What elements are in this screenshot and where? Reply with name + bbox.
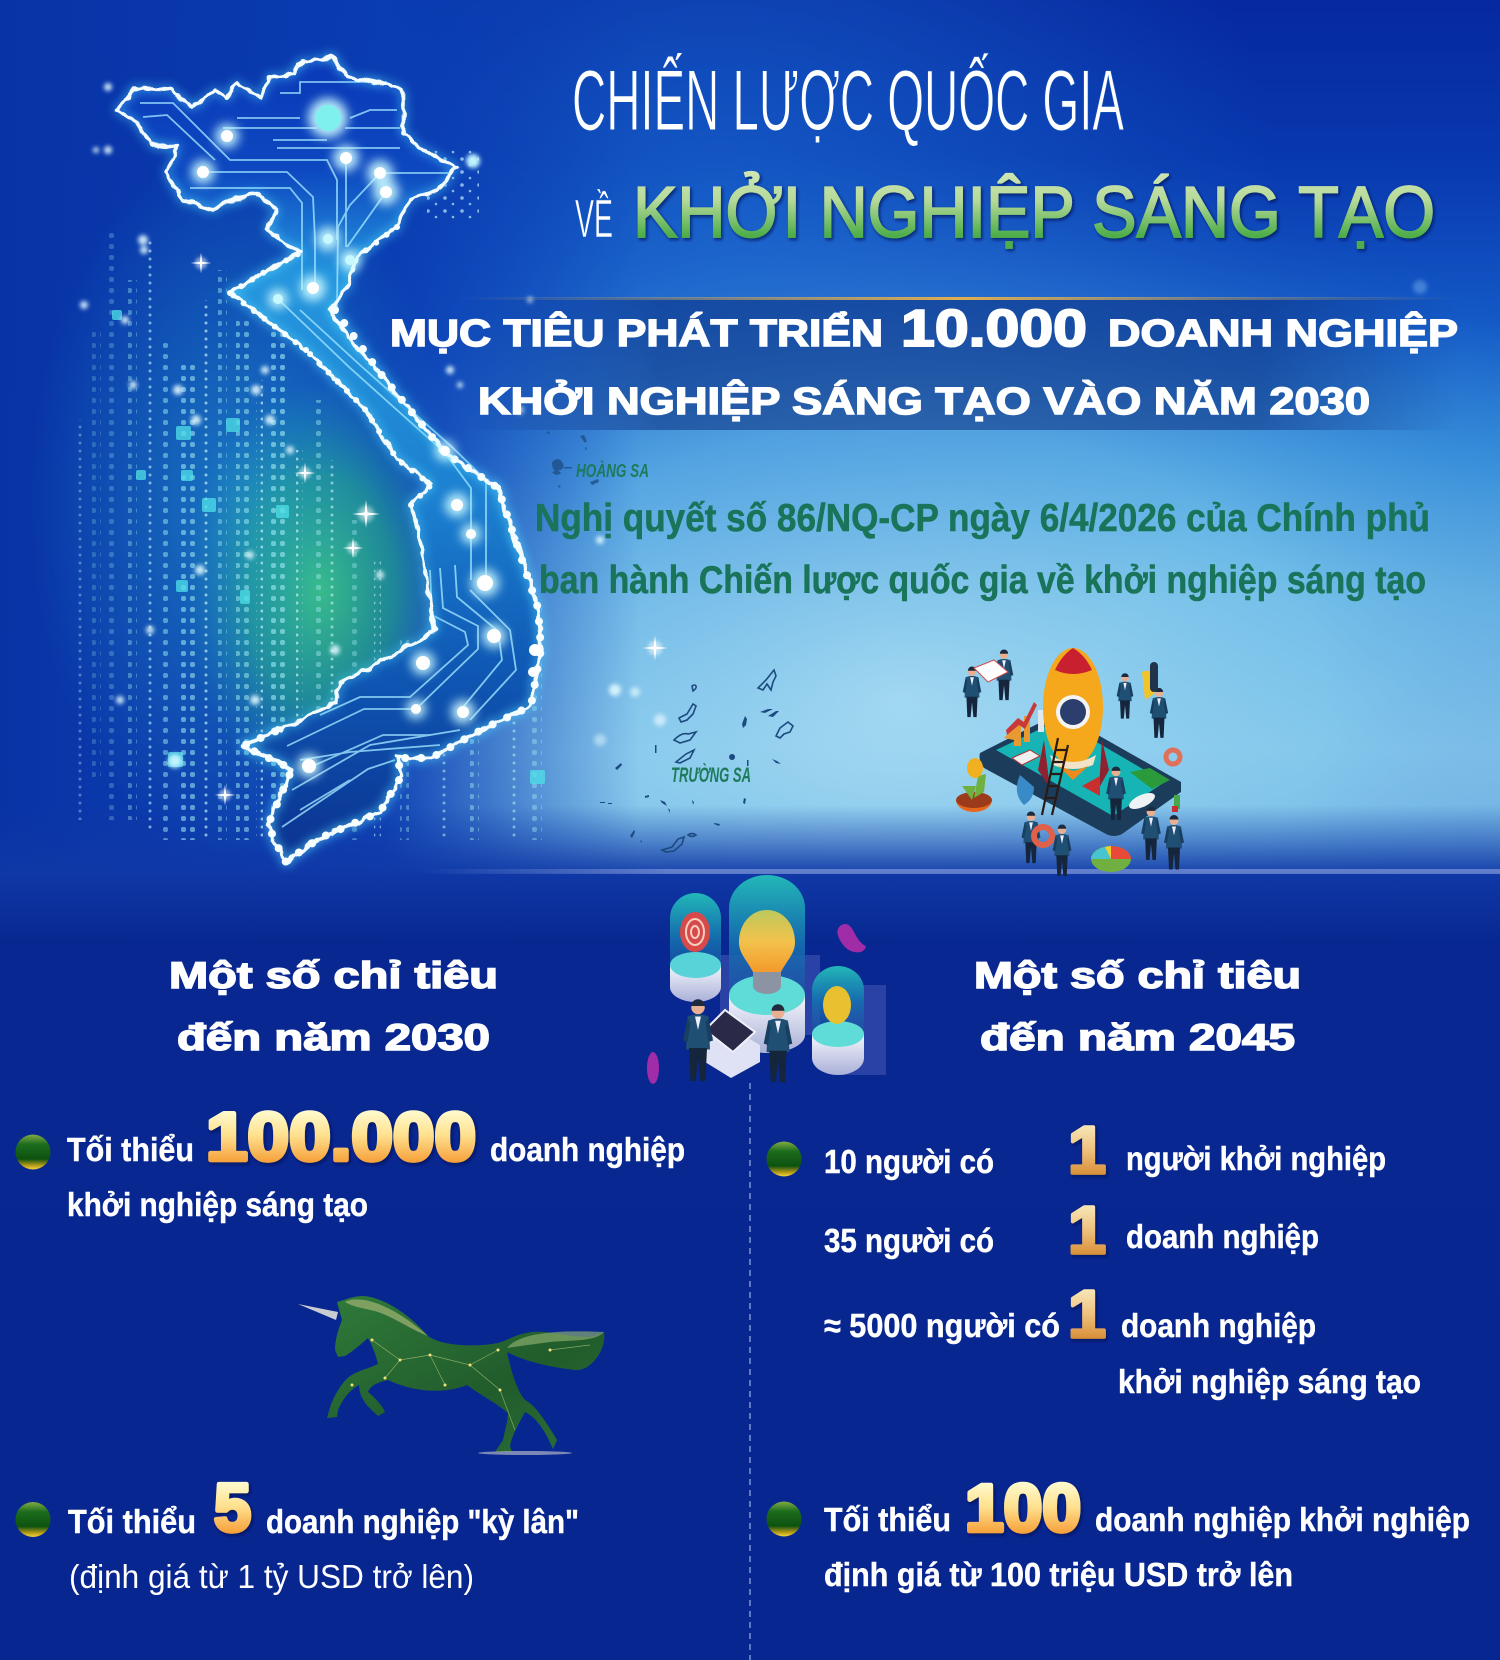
item: ratio 10 people: người khởi nghiệp <box>1126 1140 1386 1177</box>
item: 100.000 startups: khởi nghiệp sáng tạo <box>67 1186 368 1223</box>
center capsule <box>729 875 805 1053</box>
circuit lines <box>140 82 516 827</box>
purple blobs <box>837 924 866 952</box>
item: ratio 5000 people: khởi nghiệp sáng tạo <box>1118 1363 1421 1400</box>
item: 100.000 startups: Tối thiểu <box>67 1131 194 1168</box>
right capsule <box>812 966 864 1075</box>
rocket <box>1038 648 1109 788</box>
item: 100 startups valued: doanh nghiệp khởi nghiệp <box>1095 1501 1470 1538</box>
horizon band <box>0 869 1500 874</box>
label: Hoàng Sa: HOÀNG SA <box>576 460 649 481</box>
background: lower panel <box>0 873 1500 1660</box>
item: ratio 35 people: doanh nghiệp <box>1126 1218 1319 1255</box>
item: 100 startups valued <box>766 1471 1470 1593</box>
number 1: 1 <box>1068 1113 1106 1188</box>
heading 2045 <box>974 955 1301 1058</box>
phone <box>980 713 1181 836</box>
charts and props <box>1004 702 1180 812</box>
item: ratio 35 people <box>824 1193 1319 1268</box>
divider dashed <box>749 1083 751 1660</box>
resolution text <box>535 497 1430 602</box>
banner line 2: KHỞI NGHIỆP SÁNG TẠO VÀO NĂM 2030 <box>478 379 1370 423</box>
glowing coastline <box>117 57 541 862</box>
background: upper sky <box>0 0 1500 880</box>
item: 5 unicorns <box>16 1470 579 1595</box>
target banner: DOANH NGHIỆP <box>1108 311 1458 355</box>
heading 2030: Một số chỉ tiêu <box>169 955 498 996</box>
map land <box>117 57 541 862</box>
title word: về: VỀ <box>575 189 613 249</box>
Trường Sa islands <box>600 670 793 852</box>
illustration: rocket on phone <box>956 648 1184 876</box>
item: ratio 5000 people: doanh nghiệp <box>1121 1307 1316 1344</box>
number 1: 1 <box>1068 1193 1106 1268</box>
item: 100 startups valued: Tối thiểu <box>824 1501 951 1538</box>
data rain behind the map <box>30 83 621 860</box>
control desk <box>705 1025 760 1078</box>
number 5: 5 <box>214 1470 251 1546</box>
ladder <box>1042 738 1068 815</box>
left capsule <box>670 893 721 1002</box>
icon: unicorn <box>298 1296 604 1455</box>
sparkles <box>168 154 1427 806</box>
target banner <box>390 297 1460 430</box>
item: ratio 5000 people <box>824 1277 1421 1400</box>
bokeh lights <box>80 83 621 705</box>
operators <box>683 999 713 1081</box>
map of Vietnam <box>117 57 541 862</box>
item: 100.000 startups: doanh nghiệp <box>490 1131 685 1168</box>
item: 100 startups valued: định giá từ 100 triệu USD trở lên <box>824 1556 1293 1593</box>
Hoàng Sa islands <box>546 431 649 488</box>
banner line 1: MỤC TIÊU PHÁT TRIỂN <box>390 310 883 355</box>
pie chart <box>1091 846 1131 872</box>
heading 2030: đến năm 2030 <box>177 1017 490 1058</box>
number 10.000: 10.000 <box>901 300 1087 358</box>
heading 2030 <box>169 955 498 1058</box>
item: ratio 10 people: 10 người có <box>824 1143 994 1180</box>
item: 100.000 startups <box>16 1099 685 1223</box>
resolution text: Nghị quyết số 86/NQ-CP ngày 6/4/2026 của Chính phủ <box>535 497 1430 540</box>
heading 2045: đến năm 2045 <box>980 1017 1295 1058</box>
title <box>572 53 1435 253</box>
item: ratio 5000 people: ≈ 5000 người có <box>824 1307 1060 1344</box>
illustration: innovation lab <box>647 875 886 1084</box>
number 100: 100 <box>965 1471 1081 1546</box>
item: 5 unicorns: Tối thiểu <box>68 1503 196 1540</box>
plant with coin <box>956 758 992 812</box>
item: ratio 10 people <box>766 1113 1386 1188</box>
number 1: 1 <box>1068 1277 1106 1352</box>
item: 5 unicorns: doanh nghiệp "kỳ lân" <box>266 1503 579 1540</box>
number 100.000: 100.000 <box>206 1099 476 1175</box>
item: 5 unicorns: (định giá từ 1 tỷ USD trở lên) <box>69 1558 474 1595</box>
circuit nodes <box>191 98 541 778</box>
label: Trường Sa: TRƯỜNG SA <box>671 763 751 787</box>
title line 2 green: KHỞI NGHIỆP SÁNG TẠO <box>633 172 1435 253</box>
item: ratio 35 people: 35 người có <box>824 1222 994 1259</box>
heading 2045: Một số chỉ tiêu <box>974 955 1301 996</box>
team figures <box>963 650 1184 876</box>
